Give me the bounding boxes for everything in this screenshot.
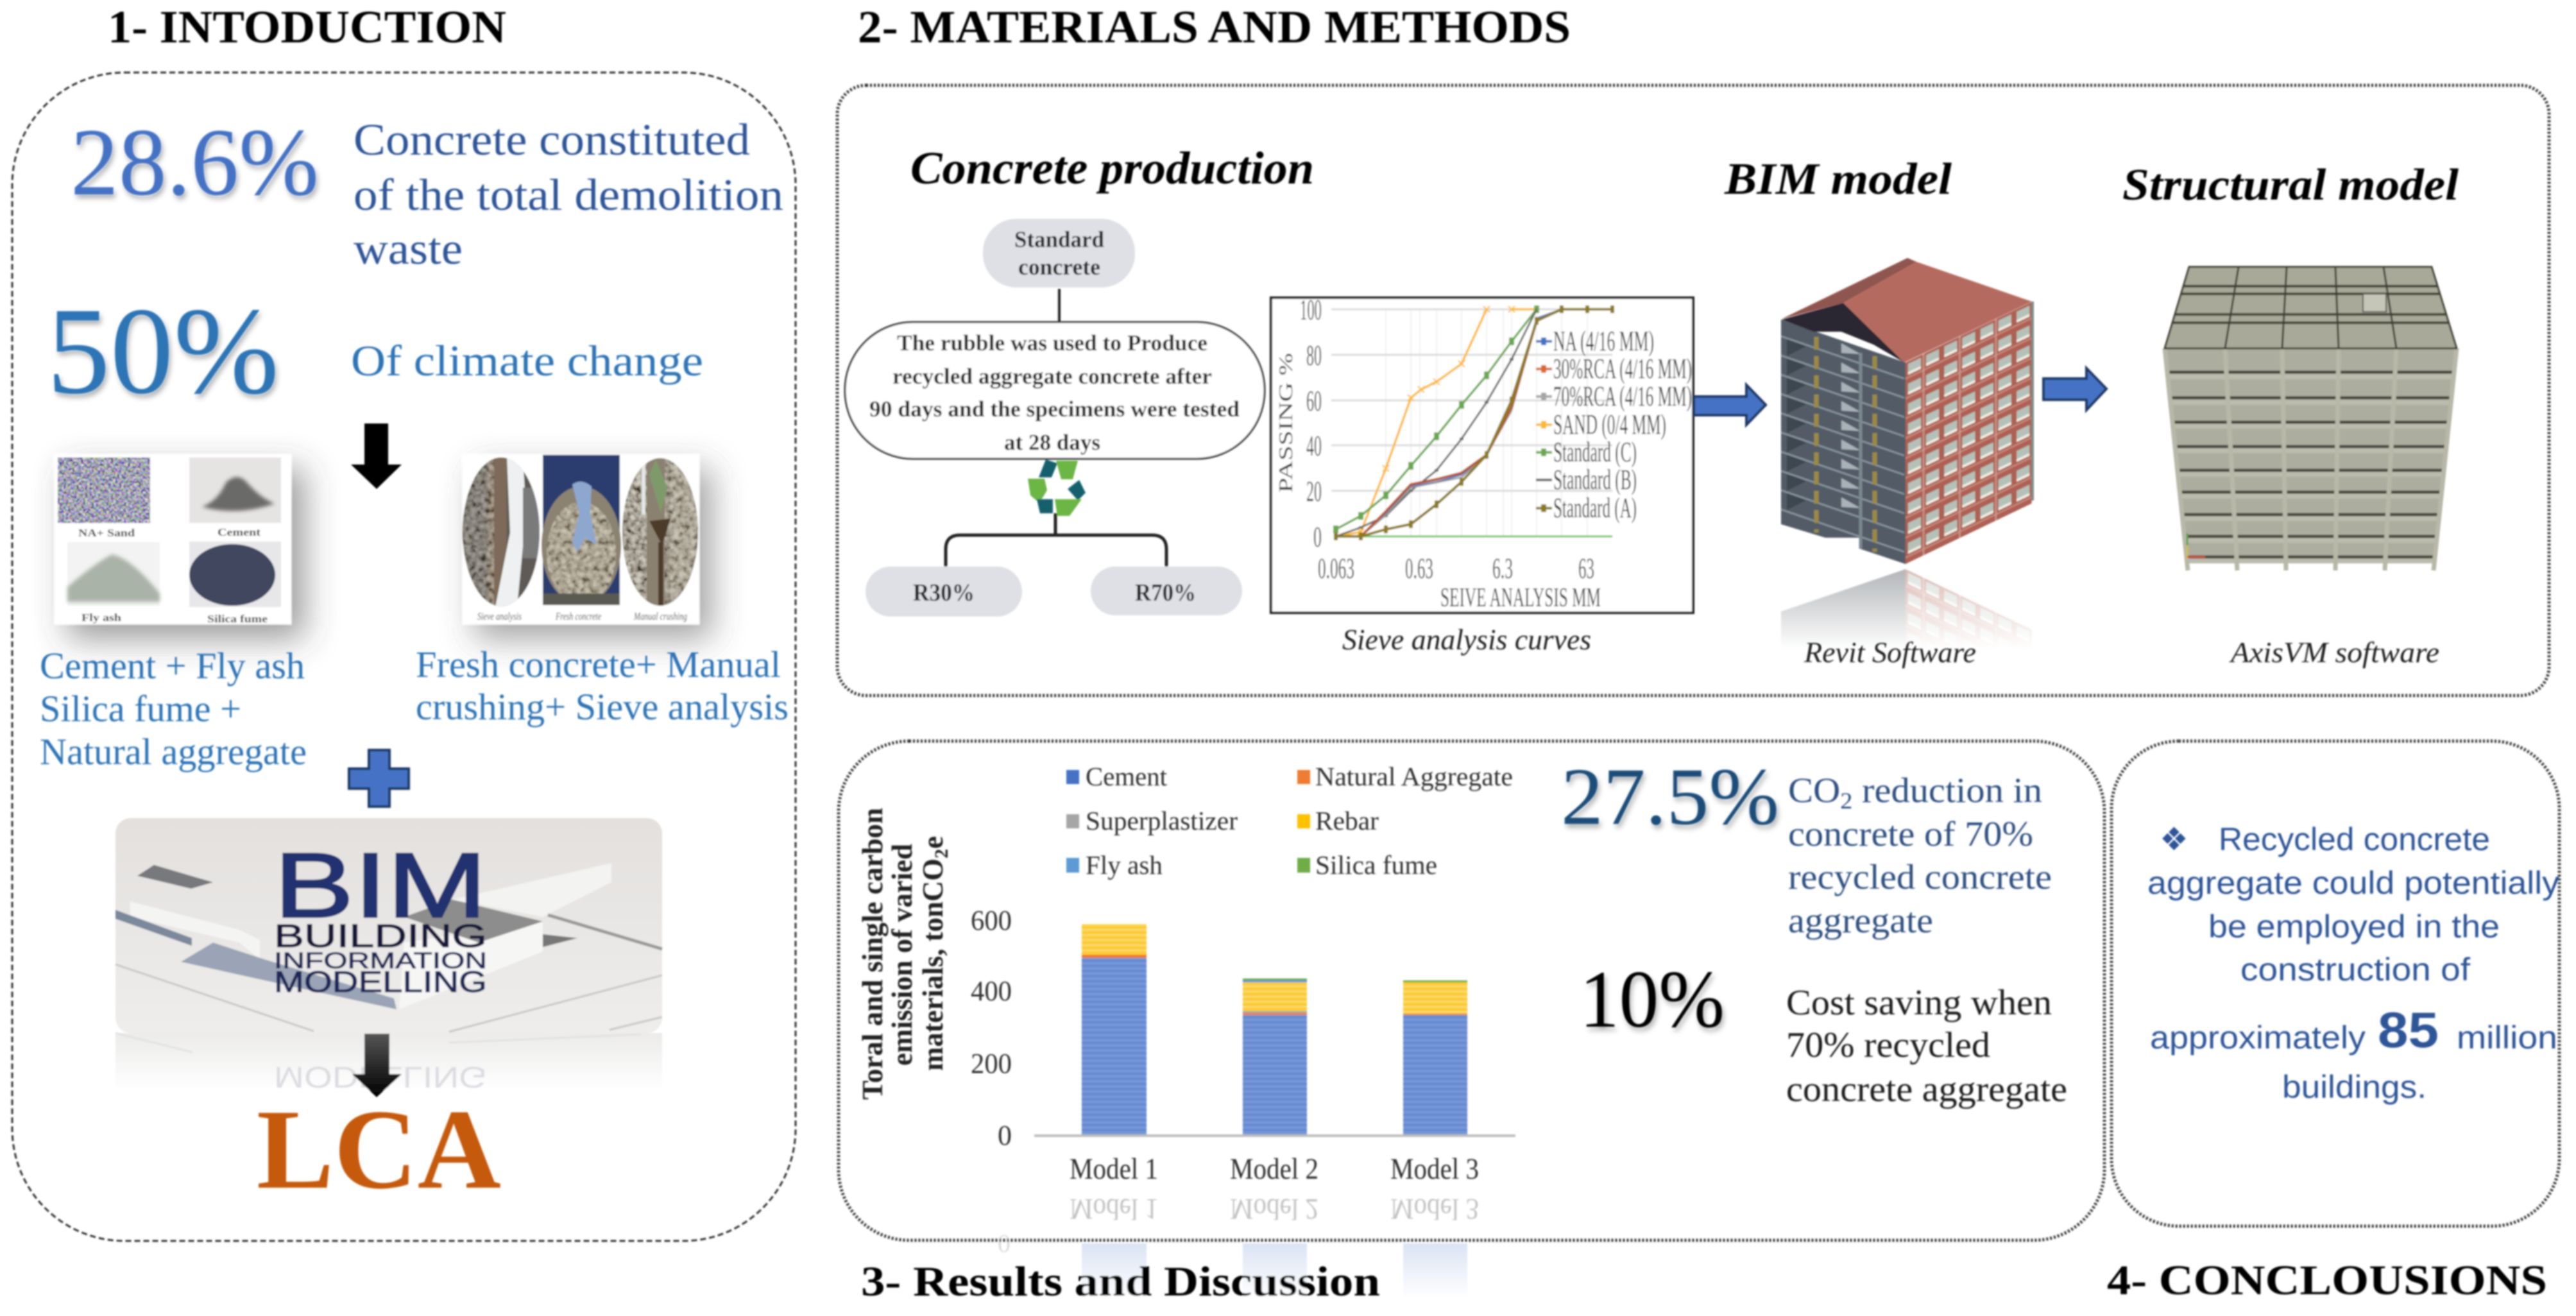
text block: CO2 reduction: aggregate xyxy=(1788,901,1933,940)
image: BIM building information modelling: INFORMATION xyxy=(274,948,487,973)
heading: 1- Introduction: 1- INTODUCTION xyxy=(108,1,506,53)
image: concrete testing photos: Manual crushing xyxy=(633,610,687,622)
y axis labels: 20 xyxy=(1306,475,1322,508)
node: rubble process description: 90 days and the specimens were tested xyxy=(869,397,1240,422)
bar: model 3 xyxy=(1403,980,1467,1136)
y axis title: emission of varied xyxy=(886,844,918,1066)
chart: carbon emission stacked bars xyxy=(857,762,1515,1298)
y axis title xyxy=(857,808,952,1100)
image: raw materials photo grid: NA+ Sand xyxy=(78,527,135,539)
y axis title: 2 xyxy=(931,849,952,859)
text block: conclusion statement: 85 xyxy=(2378,1002,2439,1058)
y axis labels: 40 xyxy=(1306,429,1322,462)
x axis labels: 0.063 xyxy=(1318,552,1354,585)
heading: 2- Materials and methods: 2- MATERIALS AND METHODS xyxy=(858,1,1571,53)
chart legend: Standard (B) xyxy=(1553,464,1637,495)
image: concrete testing photos: Fresh concrete xyxy=(555,610,601,622)
chart legend: 30%RCA (4/16 MM) xyxy=(1553,353,1692,384)
chart legend: Superplastizer xyxy=(1086,806,1238,835)
y axis title: e xyxy=(917,836,949,849)
text block: cement + fly ash ingredients: Natural aggregate xyxy=(40,731,307,773)
chart legend: Silica fume xyxy=(1315,850,1437,880)
arrow: BIM to structural model xyxy=(2043,368,2106,410)
image: BIM building information modelling: MODELLING xyxy=(274,1061,487,1094)
icon: bullet diamond: ❖ xyxy=(2160,821,2188,858)
node: standard concrete: concrete xyxy=(1018,254,1100,280)
node: R30%: R30% xyxy=(913,579,975,606)
text block: concrete share of demolition waste: waste xyxy=(354,225,463,274)
text block: CO2 reduction xyxy=(1788,771,2052,940)
y axis labels: 200 xyxy=(971,1048,1012,1079)
icon: plus sign xyxy=(349,750,409,807)
text block: concrete share of demolition waste: of the total demolition xyxy=(354,171,783,220)
subheading: concrete production: Concrete production xyxy=(910,142,1314,194)
y axis labels: 400 xyxy=(971,975,1012,1007)
x axis labels: Model 1 xyxy=(1070,1152,1158,1186)
text block: cost saving: Cost saving when xyxy=(1786,983,2052,1023)
subheading: BIM model: BIM model xyxy=(1724,155,1952,204)
x axis labels xyxy=(1070,1152,1479,1186)
node: rubble process description: recycled aggregate concrete after xyxy=(892,364,1212,389)
panel: results and discussion xyxy=(839,741,2104,1298)
text block: fresh concrete, crushing, sieve: crushing+ Sieve analysis xyxy=(416,686,789,728)
reflection: chart labels xyxy=(998,1192,1479,1258)
x axis labels xyxy=(1318,552,1594,585)
reflection: chart labels: Model 1 xyxy=(1070,1192,1158,1226)
node: rubble process description xyxy=(845,322,1265,459)
heading: 4- Conclusions: 4- CONCLOUSIONS xyxy=(2107,1257,2547,1304)
text block: cost saving: 70% recycled xyxy=(1786,1025,1990,1065)
image: BIM building information modelling: BIM xyxy=(274,835,487,937)
node: rubble process description: at 28 days xyxy=(1004,430,1100,455)
text block: conclusion statement: approximately xyxy=(2150,1020,2366,1055)
chart legend: 70%RCA (4/16 MM) xyxy=(1553,380,1692,412)
y axis labels xyxy=(1300,293,1322,553)
text block: conclusion statement xyxy=(2147,821,2559,1105)
text block: fresh concrete, crushing, sieve: Fresh concrete+ Manual xyxy=(416,644,781,685)
node: R30% xyxy=(866,567,1022,617)
image: raw materials photo grid xyxy=(55,454,304,638)
x axis labels: Model 3 xyxy=(1390,1152,1479,1186)
x axis labels: 0.63 xyxy=(1405,552,1433,585)
text block: cost saving xyxy=(1786,983,2067,1109)
x axis labels: 63 xyxy=(1578,552,1594,585)
stat: 10%: 10% xyxy=(1580,955,1725,1045)
text block: cement + fly ash ingredients xyxy=(40,645,307,773)
text block: conclusion statement: million xyxy=(2457,1020,2557,1055)
y axis labels: 60 xyxy=(1306,384,1322,417)
image: BIM building model xyxy=(1781,258,2033,564)
chart legend: Standard (C) xyxy=(1553,436,1637,468)
image: concrete testing photos: Sieve analysis xyxy=(477,610,522,622)
icon: down arrow xyxy=(351,423,402,489)
chart legend: Standard (A) xyxy=(1553,492,1637,524)
panel: conclusions xyxy=(2111,741,2559,1226)
text block: concrete share of demolition waste: Concrete constituted xyxy=(354,115,750,165)
text block: CO2 reduction: recycled concrete xyxy=(1788,857,2052,896)
caption: Revit software: Revit Software xyxy=(1804,636,1976,669)
y axis labels: 0 xyxy=(1313,520,1322,553)
text block: conclusion statement: construction of xyxy=(2240,952,2470,987)
subheading: structural model: Structural model xyxy=(2122,160,2459,210)
y axis labels: 80 xyxy=(1306,339,1322,372)
text block: cost saving: concrete aggregate xyxy=(1786,1070,2067,1109)
image: BIM building information modelling: MODELLING xyxy=(274,965,487,998)
text block: CO2 reduction: concrete of 70% xyxy=(1788,814,2033,853)
flowchart: concrete mix design xyxy=(845,219,1265,617)
bar: model 1 xyxy=(1082,924,1147,1136)
x axis title: SEIVE ANALYSIS MM xyxy=(1440,583,1601,613)
chart: sieve analysis curves: 100 xyxy=(1300,293,1322,326)
chart legend: NA (4/16 MM) xyxy=(1553,325,1654,357)
icon: recycle symbol xyxy=(1028,459,1086,516)
x axis labels: Model 2 xyxy=(1230,1152,1318,1186)
node: standard concrete: Standard xyxy=(1014,226,1104,252)
stat: 27.5%: 27.5% xyxy=(1561,752,1779,842)
icon: down arrow to LCA xyxy=(352,1034,402,1097)
image: raw materials photo grid: Cement xyxy=(218,526,260,538)
stat: 28.6%: 28.6% xyxy=(71,109,319,216)
arrow: chart to BIM model xyxy=(1694,385,1766,425)
image: AxisVM structural model xyxy=(2165,267,2457,570)
heading: 3- Results and Discussion: 3- Results and Discussion xyxy=(861,1258,1380,1305)
y axis labels: 0 xyxy=(998,1120,1012,1151)
bar: model 2 xyxy=(1243,978,1307,1136)
node: standard concrete xyxy=(983,219,1135,287)
chart legend: Natural Aggregate xyxy=(1315,762,1513,791)
panel: materials and methods xyxy=(837,85,2549,714)
text block: CO2 reduction: CO xyxy=(1788,771,1837,810)
image: raw materials photo grid: Silica fume xyxy=(207,613,268,625)
chart legend xyxy=(1536,325,1692,524)
node: R70% xyxy=(1091,567,1242,615)
reflection: chart labels: 0 xyxy=(998,1229,1011,1258)
image: concrete testing photos xyxy=(462,454,712,638)
y axis title: Toral and single carbon xyxy=(857,808,889,1100)
x axis labels: 6.3 xyxy=(1492,552,1513,585)
text block: CO2 reduction: 2 xyxy=(1840,788,1852,814)
chart: sieve analysis curves xyxy=(1271,293,1693,613)
reflection: chart labels: Model 2 xyxy=(1230,1192,1318,1226)
chart legend: Fly ash xyxy=(1086,850,1163,880)
image: BIM building information modelling xyxy=(115,818,662,1094)
node: rubble process description: The rubble was used to Produce xyxy=(897,330,1207,355)
y axis labels: 600 xyxy=(971,905,1012,936)
chart legend: Cement xyxy=(1086,762,1168,791)
text block: concrete share of demolition waste xyxy=(354,115,783,274)
heading: LCA: LCA xyxy=(257,1086,501,1213)
y axis title: PASSING % xyxy=(1274,353,1297,493)
image: raw materials photo grid: Fly ash xyxy=(81,611,122,624)
stat: 50%: 50% xyxy=(47,282,279,420)
text block: conclusion statement: buildings. xyxy=(2282,1069,2427,1105)
y axis labels xyxy=(971,905,1012,1151)
node: R70%: R70% xyxy=(1135,579,1196,606)
chart legend xyxy=(1066,762,1513,880)
text block: CO2 reduction: reduction in xyxy=(1852,771,2042,810)
reflection: chart labels: Model 3 xyxy=(1390,1192,1479,1226)
text block: cement + fly ash ingredients: Silica fume + xyxy=(40,688,241,730)
y axis title: materials, tonCO xyxy=(917,858,949,1071)
caption: AxisVM software: AxisVM software xyxy=(2229,636,2439,669)
text block: cement + fly ash ingredients: Cement + Fly ash xyxy=(40,645,305,687)
chart legend: SAND (0/4 MM) xyxy=(1553,409,1666,440)
reflection: BIM building xyxy=(1780,568,2031,648)
image: BIM building information modelling: BUILDING xyxy=(274,918,487,954)
text block: conclusion statement: Recycled concrete xyxy=(2219,821,2490,857)
chart legend: Rebar xyxy=(1315,806,1379,835)
text block: conclusion statement: be employed in the xyxy=(2208,909,2500,944)
text block: conclusion statement: aggregate could potentially xyxy=(2147,865,2559,901)
text block: of climate change: Of climate change xyxy=(351,336,703,385)
caption: sieve analysis curves: Sieve analysis curves xyxy=(1342,623,1591,656)
text block: fresh concrete, crushing, sieve xyxy=(416,644,789,728)
panel: introduction xyxy=(12,73,796,1241)
